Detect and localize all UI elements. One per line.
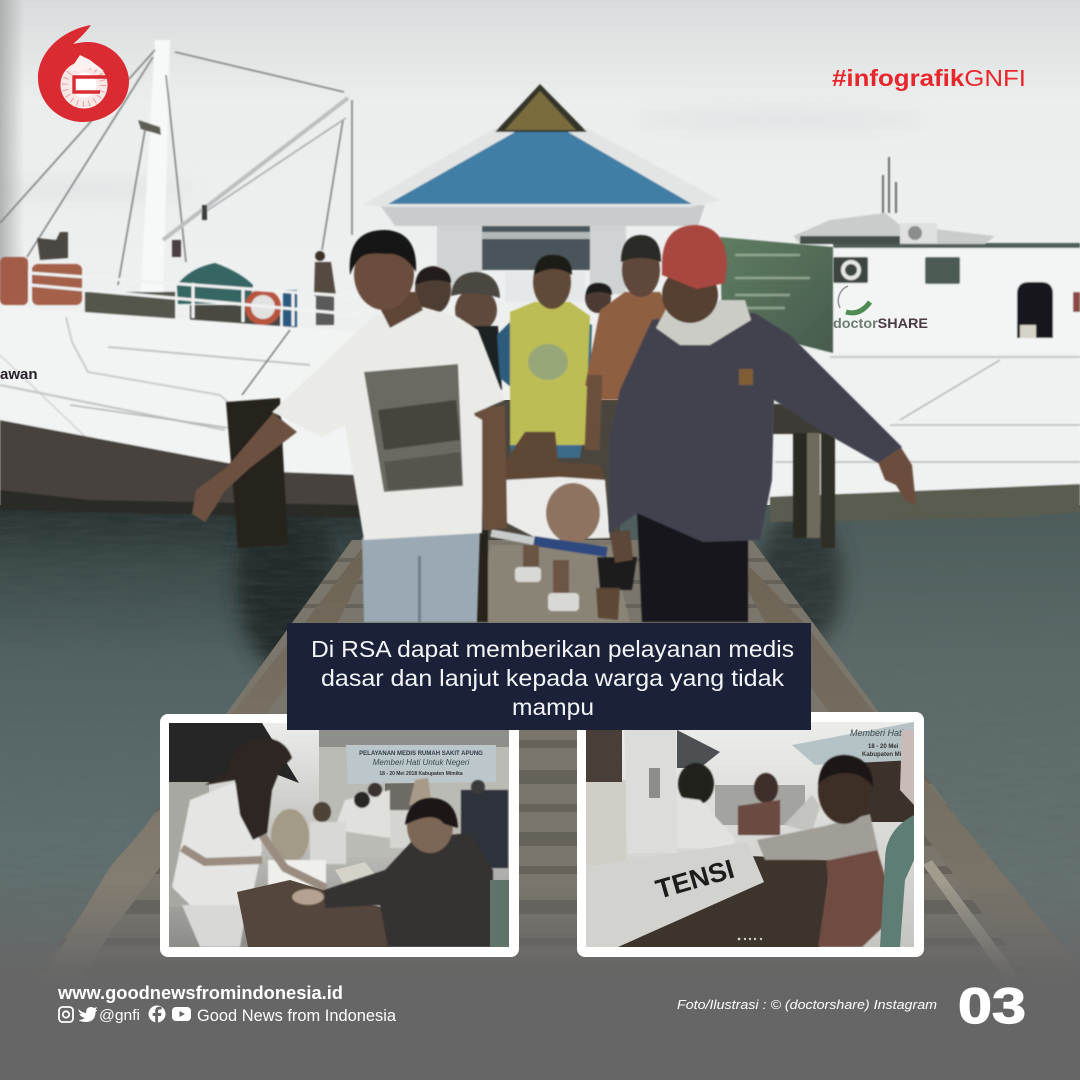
page number: 03 — [958, 978, 1026, 1034]
banner: 18 - 20 Mei 2018 Kabupaten Mimika — [379, 771, 463, 777]
pagination dots — [738, 938, 762, 940]
icon: twitter — [78, 1007, 98, 1022]
social handle: @gnfi — [99, 1008, 140, 1024]
left rail — [35, 548, 372, 990]
logo emblem — [65, 55, 107, 104]
banner — [792, 722, 914, 765]
icon: youtube — [172, 1007, 191, 1021]
cap — [662, 225, 727, 289]
white frame — [160, 714, 519, 957]
man in dark jacket — [609, 225, 916, 622]
hand left — [610, 530, 633, 563]
hull waterline — [0, 420, 360, 518]
head — [546, 483, 600, 543]
jeans — [362, 530, 480, 622]
left wall — [169, 782, 209, 907]
doctorSHARE banner — [720, 237, 833, 353]
seated man — [738, 773, 820, 835]
desk — [610, 856, 831, 947]
caption text — [311, 636, 794, 720]
neck and face — [372, 292, 423, 328]
crowd — [268, 778, 508, 886]
building — [319, 747, 509, 834]
right inner bar — [923, 860, 1018, 983]
banner: Memberi Hati Untuk Negeri — [373, 758, 469, 767]
photo credit: Foto/Ilustrasi : © (doctorshare) Instagram — [677, 997, 937, 1012]
mast and rigging — [0, 40, 352, 300]
jacket — [609, 312, 902, 542]
nurse forearm — [262, 835, 326, 888]
arm right — [474, 405, 507, 530]
water — [0, 505, 560, 1020]
patient in hoodie — [292, 798, 493, 947]
water reflections — [237, 490, 842, 670]
banner: Memberi Hati — [850, 728, 905, 738]
pants — [637, 510, 748, 622]
bottom fade — [0, 880, 1080, 990]
railing — [30, 270, 360, 326]
doctorSHARE logo icon — [838, 286, 870, 313]
hashtag #infografikGNFI: #infografik GNFI — [832, 65, 1026, 91]
page name: Good News from Indonesia — [197, 1007, 397, 1025]
icon: instagram — [59, 1007, 73, 1022]
person: brown shirt — [585, 235, 672, 450]
t-shirt — [272, 307, 505, 540]
caption box — [287, 623, 811, 730]
background building — [715, 785, 805, 825]
chair — [880, 815, 914, 947]
deck cargo — [0, 232, 336, 328]
feet and arms — [505, 432, 606, 485]
shirt — [505, 477, 610, 540]
TENSI sign — [586, 842, 764, 947]
hull — [0, 306, 360, 480]
right rail — [746, 567, 1080, 990]
photo panel right: TENSI desk — [577, 712, 924, 957]
logo GNFI — [38, 25, 129, 122]
banner — [346, 745, 496, 784]
nurse hair — [205, 738, 292, 840]
seated woman — [677, 763, 735, 850]
left person — [586, 780, 626, 865]
white frame — [577, 712, 924, 957]
planks — [64, 558, 1001, 939]
hood — [656, 300, 751, 345]
stretcher pole — [491, 533, 534, 541]
gazebo — [362, 84, 720, 302]
banner: 18 - 20 Mei — [868, 744, 899, 750]
clouds — [0, 108, 930, 200]
arm left — [192, 413, 297, 522]
patient on stretcher — [476, 432, 637, 622]
person: far left — [415, 266, 451, 314]
ship name: awan — [0, 366, 38, 383]
pier deck — [30, 540, 1080, 985]
right person — [900, 730, 914, 805]
water right — [560, 505, 1080, 1020]
icon: facebook — [148, 1006, 166, 1023]
tent — [169, 723, 299, 783]
sky — [0, 0, 1080, 520]
person: cap — [451, 272, 502, 390]
legs and sandals — [523, 545, 539, 569]
caption text: Di RSA dapat memberikan pelayanan medis — [311, 636, 794, 662]
photo panel left: medical service — [160, 714, 519, 957]
person: small background — [585, 283, 612, 313]
hand right — [878, 446, 916, 505]
hair — [350, 230, 416, 275]
right photo content — [586, 722, 914, 947]
face — [662, 267, 718, 323]
right ship — [770, 157, 1080, 522]
water ripple texture — [0, 505, 1080, 945]
dark zone behind patient — [480, 400, 620, 540]
nurse — [172, 738, 326, 947]
caption text: mampu — [512, 694, 594, 720]
table — [237, 880, 389, 947]
left ship — [0, 40, 360, 518]
banner: PELAYANAN MEDIS RUMAH SAKIT APUNG — [359, 751, 483, 757]
pier — [58, 540, 1058, 962]
background people — [415, 235, 672, 458]
chair — [490, 880, 509, 947]
website: www.goodnewsfromindonesia.id — [57, 983, 343, 1003]
banner: Kabupaten Mim — [862, 752, 907, 758]
deck between legs — [480, 545, 630, 622]
left photo content — [169, 723, 509, 947]
TENSI sign: TENSI — [652, 854, 738, 905]
pier posts — [226, 398, 835, 548]
boy — [757, 755, 886, 947]
footer website and socials — [57, 983, 397, 1025]
shirt graphic — [364, 364, 463, 492]
man in white t-shirt — [192, 230, 507, 622]
person: yellow shirt — [497, 255, 592, 458]
doctorSHARE label: doctorSHARE — [833, 315, 928, 331]
kiosk — [624, 730, 676, 768]
caption text: dasar dan lanjut kepada warga yang tidak — [321, 665, 785, 691]
